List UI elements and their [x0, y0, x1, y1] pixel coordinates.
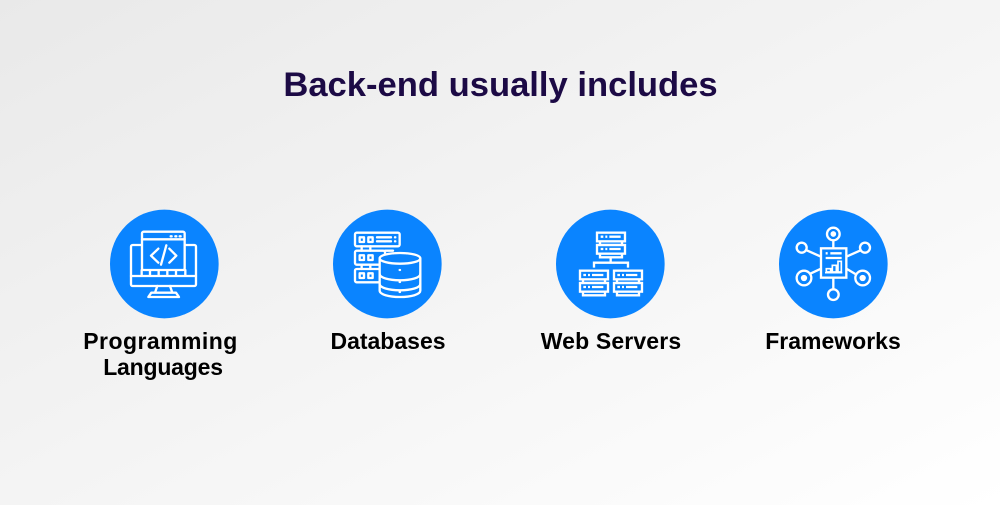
label: frameworks: Frameworks	[765, 328, 901, 354]
label: databases: Databases	[330, 328, 446, 354]
label: web servers: Web Servers	[541, 328, 681, 354]
label: programming languages: Languages	[103, 354, 223, 380]
title: Back-end usually includes	[283, 66, 718, 104]
label: programming languages	[83, 328, 238, 380]
icon: databases	[333, 210, 442, 318]
icon: programming languages	[110, 210, 219, 318]
label: programming languages: Programming	[83, 328, 238, 354]
icon: frameworks	[779, 210, 888, 318]
icon: web servers	[556, 210, 665, 318]
